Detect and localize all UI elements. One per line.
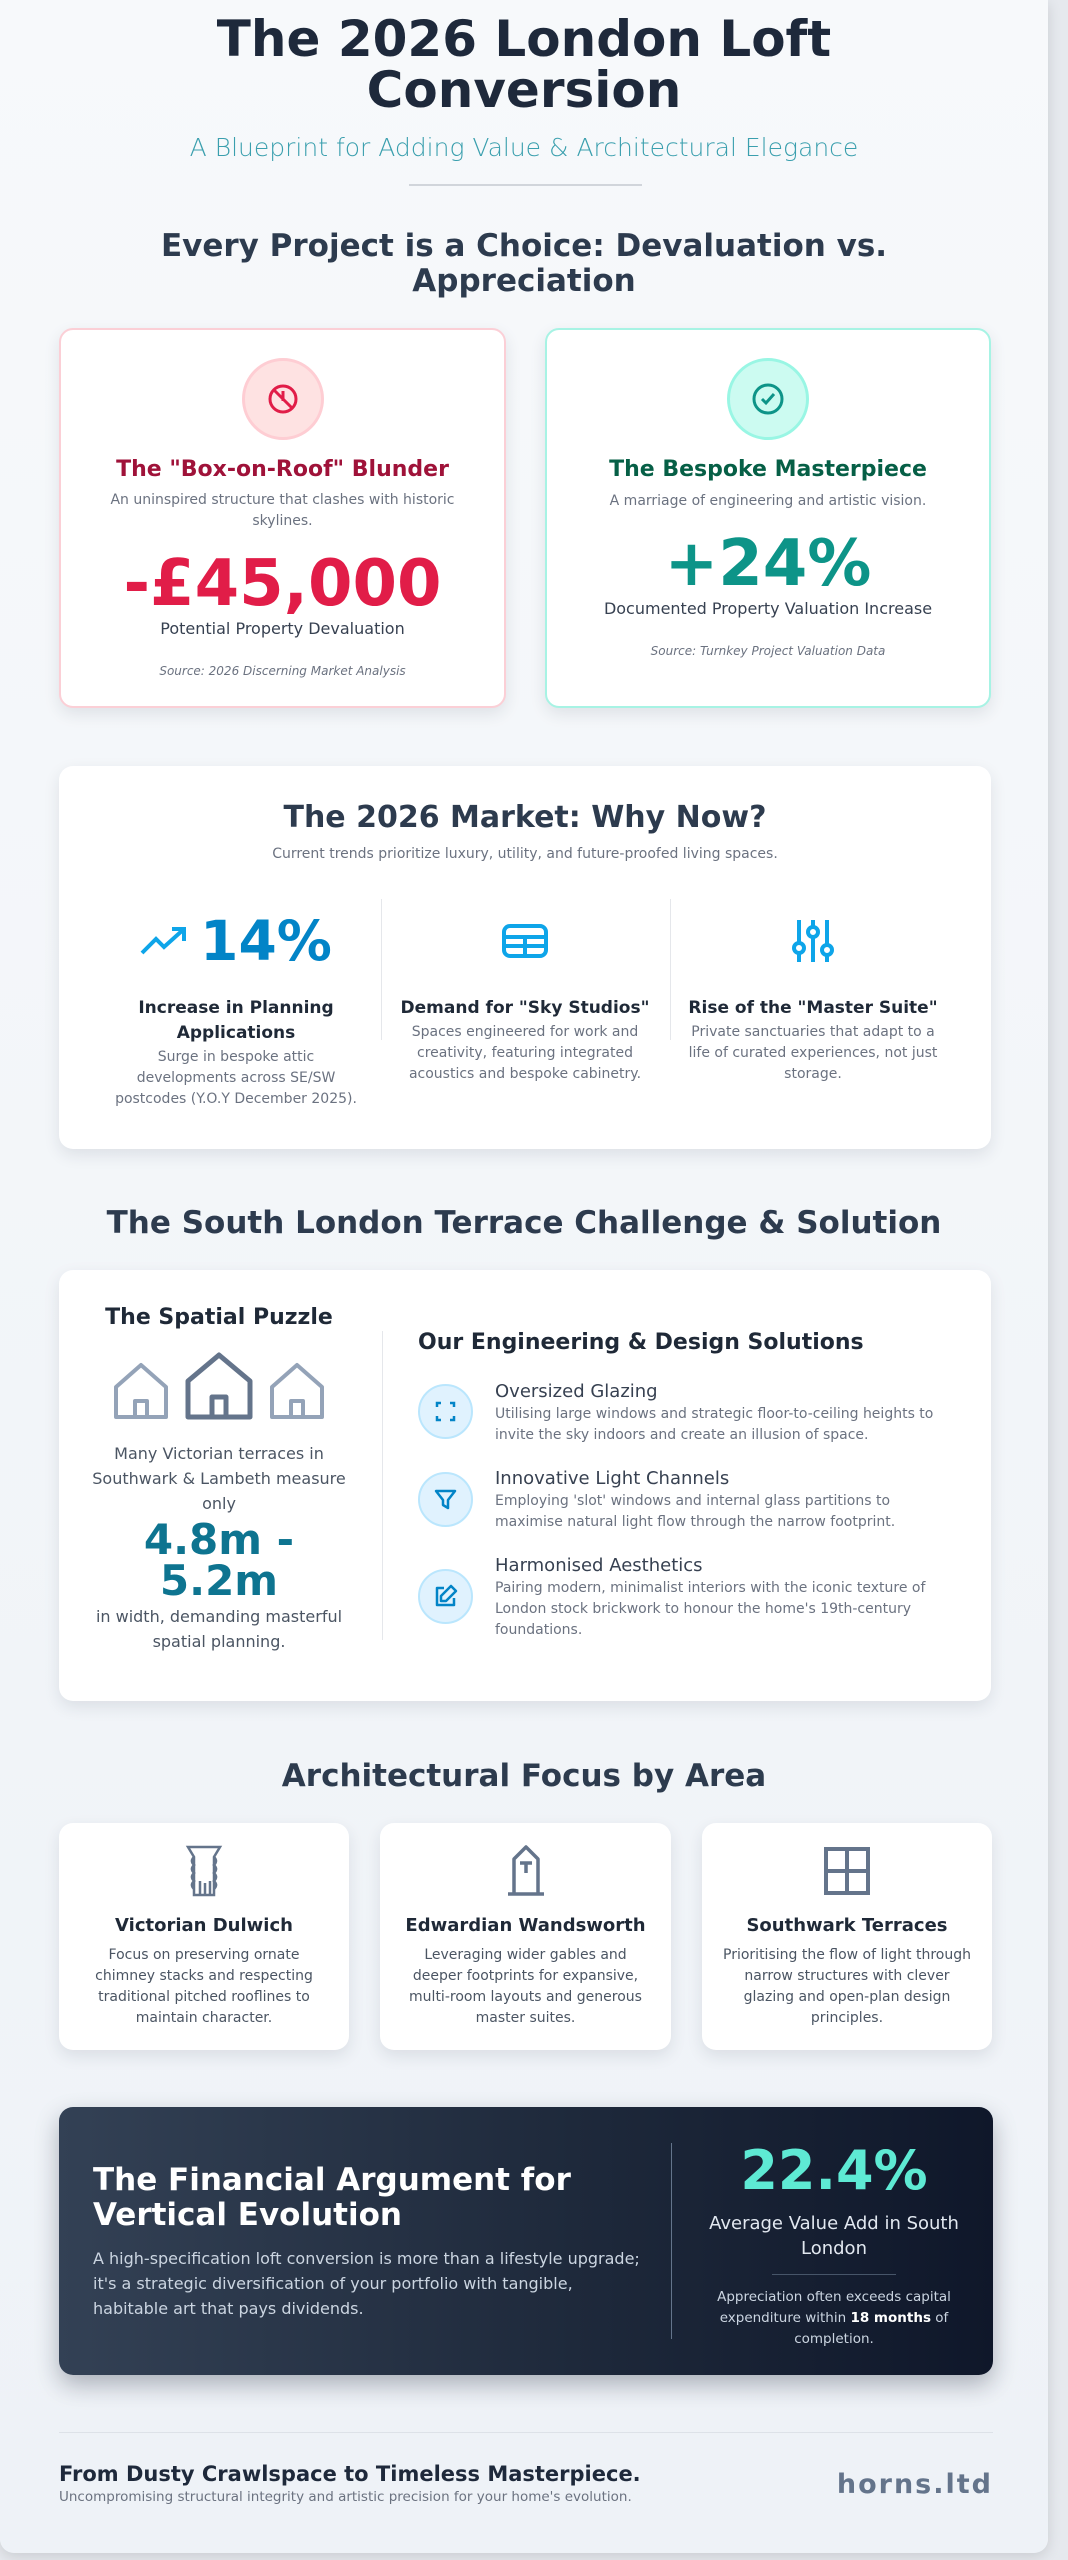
- stat column: sky studios: Spaces engineered for work and: [412, 1024, 638, 1040]
- solution: oversized glazing: Utilising large windows and strategic floor-to-ceiling heights to: [495, 1406, 933, 1422]
- icon: edit: [418, 1569, 473, 1624]
- panel: victorian dulwich: chimney stacks and respecting: [95, 1968, 313, 1984]
- solution: harmonised aesthetics: London stock brickwork to honour the home's 19th-century: [495, 1601, 911, 1617]
- area title: Edwardian Wandsworth: [405, 1915, 646, 1936]
- spatial puzzle column: The Spatial Puzzle: [105, 1305, 333, 1330]
- card title: The "Box-on-Roof" Blunder: [116, 457, 449, 482]
- heading: choice: [161, 228, 887, 299]
- panel: edwardian wandsworth: multi-room layouts and generous: [409, 1989, 642, 2005]
- financial text: habitable art that pays dividends.: [93, 2299, 364, 2318]
- area title: Victorian Dulwich: [115, 1915, 293, 1936]
- spatial puzzle column: Southwark & Lambeth measure: [92, 1469, 346, 1488]
- card title: The Bespoke Masterpiece: [609, 457, 927, 482]
- source: Source: 2026 Discerning Market Analysis: [159, 664, 406, 678]
- heading: choice: Appreciation: [412, 263, 636, 299]
- stat column: master suite: life of curated experiences, not just: [689, 1045, 937, 1061]
- financial text: [93, 2249, 640, 2318]
- icon: studio panel: [502, 924, 548, 958]
- panel: victorian dulwich: maintain character.: [136, 2010, 272, 2026]
- title: The 2026 London Loft: [217, 10, 831, 68]
- spatial puzzle column: [92, 1305, 346, 1651]
- stat: 22.4%: completion.: [794, 2331, 874, 2347]
- footer brand: horns.ltd: [837, 2469, 993, 2500]
- stat: 22.4%: [709, 2139, 959, 2347]
- panel: southwark terraces: [702, 1823, 992, 2050]
- panel: terrace challenge & solution: [59, 1270, 991, 1701]
- stat column: sky studios: creativity, featuring integrated: [417, 1045, 633, 1061]
- footer tagline: From Dusty Crawlspace to Timeless Masterpiece.: [59, 2462, 641, 2486]
- icon: houses: [114, 1352, 324, 1420]
- stat column: 14%: [115, 909, 357, 1107]
- icon: gable door: [508, 1845, 544, 1896]
- solution: light channels: maximise natural light flow through the narrow footprint.: [495, 1514, 895, 1530]
- area title: Southwark Terraces: [746, 1915, 948, 1936]
- stat column: sky studios: [401, 924, 649, 1082]
- panel: box-on-roof blunder: Potential Property Devaluation: [160, 619, 405, 638]
- icon: prohibited: [242, 358, 324, 440]
- panel: bespoke masterpiece: Documented Property Valuation Increase: [604, 599, 932, 618]
- panel: market why now: Current trends prioritize luxury, utility, and future-proofed living spaces.: [272, 846, 778, 862]
- icon: sliders: [792, 920, 834, 962]
- stat column: 14%: developments across SE/SW: [137, 1070, 335, 1086]
- stat: 22.4%: 22.4%: [740, 2139, 928, 2202]
- stat column: master suite: Rise of the "Master Suite": [688, 998, 938, 1018]
- spatial puzzle column: Many Victorian terraces in: [114, 1444, 324, 1463]
- heading: The 2026 Market: Why Now?: [283, 800, 766, 835]
- solution: oversized glazing: Oversized Glazing: [495, 1381, 658, 1402]
- financial heading: [93, 2162, 571, 2233]
- icon: window: [824, 1847, 870, 1895]
- panel: southwark terraces: glazing and open-plan design: [744, 1989, 950, 2005]
- spatial puzzle column: in width, demanding masterful: [96, 1607, 342, 1626]
- description: An uninspired structure that clashes with historic skylines.: [110, 492, 455, 529]
- source: Source: Turnkey Project Valuation Data: [651, 644, 885, 658]
- panel: victorian dulwich: traditional pitched rooflines to: [98, 1989, 310, 2005]
- panel: edwardian wandsworth: deeper footprints for expansive,: [413, 1968, 638, 1984]
- panel: southwark terraces: principles.: [811, 2010, 883, 2026]
- panel: victorian dulwich: Focus on preserving ornate: [109, 1947, 299, 1963]
- heading: architectural focus: Architectural Focus by Area: [282, 1758, 766, 1794]
- financial text: it's a strategic diversification of your portfolio with tangible,: [93, 2274, 573, 2293]
- stat: +24%: [665, 527, 871, 601]
- stat column: master suite: Private sanctuaries that adapt to a: [691, 1024, 935, 1040]
- stat column: 14%: Applications: [177, 1023, 295, 1043]
- title: Conversion: [367, 61, 681, 119]
- icon: trending up + number: 14%: [200, 909, 332, 973]
- spatial puzzle column: spatial planning.: [153, 1632, 285, 1651]
- panel: market why now: [59, 766, 991, 1149]
- footer tagline: [59, 2462, 641, 2505]
- stat column: master suite: storage.: [784, 1066, 842, 1082]
- panel: box-on-roof blunder: [59, 328, 506, 708]
- panel: edwardian wandsworth: Leveraging wider gables and: [424, 1947, 627, 1963]
- icon: trending up + number: [140, 909, 332, 973]
- stat column: 14%: Surge in bespoke attic: [158, 1049, 314, 1065]
- icon: check: [727, 358, 809, 440]
- financial heading: The Financial Argument for: [93, 2162, 571, 2198]
- spatial puzzle column: 4.8m -: [144, 1515, 294, 1564]
- icon: expand: [418, 1384, 473, 1439]
- financial text: A high-specification loft conversion is more than a lifestyle upgrade;: [93, 2249, 640, 2268]
- description: A marriage of engineering and artistic vision.: [610, 493, 926, 509]
- heading: terrace challenge: The South London Terrace Challenge & Solution: [107, 1205, 941, 1241]
- solutions heading: Our Engineering & Design Solutions: [418, 1330, 864, 1355]
- icon: funnel: [418, 1472, 473, 1527]
- solution: harmonised aesthetics: Pairing modern, minimalist interiors with the iconic texture of: [495, 1580, 925, 1596]
- spatial puzzle column: only: [202, 1494, 236, 1513]
- stat column: sky studios: acoustics and bespoke cabinetry.: [409, 1066, 641, 1082]
- financial heading: Vertical Evolution: [93, 2197, 402, 2233]
- solution: light channels: Employing 'slot' windows and internal glass partitions to: [495, 1493, 890, 1509]
- spatial puzzle column: 5.2m: [160, 1556, 278, 1605]
- solution: harmonised aesthetics: foundations.: [495, 1622, 582, 1638]
- footer tagline: Uncompromising structural integrity and artistic precision for your home's evolution.: [59, 2489, 632, 2505]
- stat: 22.4%: expenditure within 18 months of: [720, 2310, 948, 2326]
- panel: edwardian wandsworth: master suites.: [476, 2010, 575, 2026]
- panel: edwardian wandsworth: [380, 1823, 671, 2050]
- solution: harmonised aesthetics: Harmonised Aesthetics: [495, 1555, 703, 1576]
- icon: chimney: [186, 1846, 222, 1896]
- solution: light channels: [418, 1468, 895, 1530]
- stat: 22.4%: Appreciation often exceeds capital: [717, 2289, 951, 2305]
- panel: victorian dulwich: [59, 1823, 349, 2050]
- stat column: 14%: Increase in Planning: [138, 998, 334, 1018]
- subtitle: A Blueprint for Adding Value & Architectural Elegance: [190, 133, 858, 162]
- stat column: master suite: [688, 920, 938, 1082]
- panel: southwark terraces: narrow structures with clever: [744, 1968, 950, 1984]
- stat: -£45,000: [123, 547, 442, 621]
- title: [217, 10, 831, 119]
- panel: southwark terraces: Prioritising the flow of light through: [723, 1947, 971, 1963]
- solution: oversized glazing: invite the sky indoors and create an illusion of space.: [495, 1427, 868, 1443]
- solution: oversized glazing: [418, 1381, 933, 1443]
- heading: choice: Every Project is a Choice: Devaluation vs.: [161, 228, 887, 264]
- stat: 22.4%: Average Value Add in South: [709, 2213, 959, 2234]
- panel: bespoke masterpiece: [545, 328, 991, 708]
- stat column: 14%: postcodes (Y.O.Y December 2025).: [115, 1091, 357, 1107]
- solution: light channels: Innovative Light Channels: [495, 1468, 729, 1489]
- panel: financial argument: [59, 2107, 993, 2375]
- stat column: sky studios: Demand for "Sky Studios": [401, 998, 649, 1018]
- stat: 22.4%: London: [801, 2238, 867, 2259]
- solution: harmonised aesthetics: [418, 1555, 926, 1638]
